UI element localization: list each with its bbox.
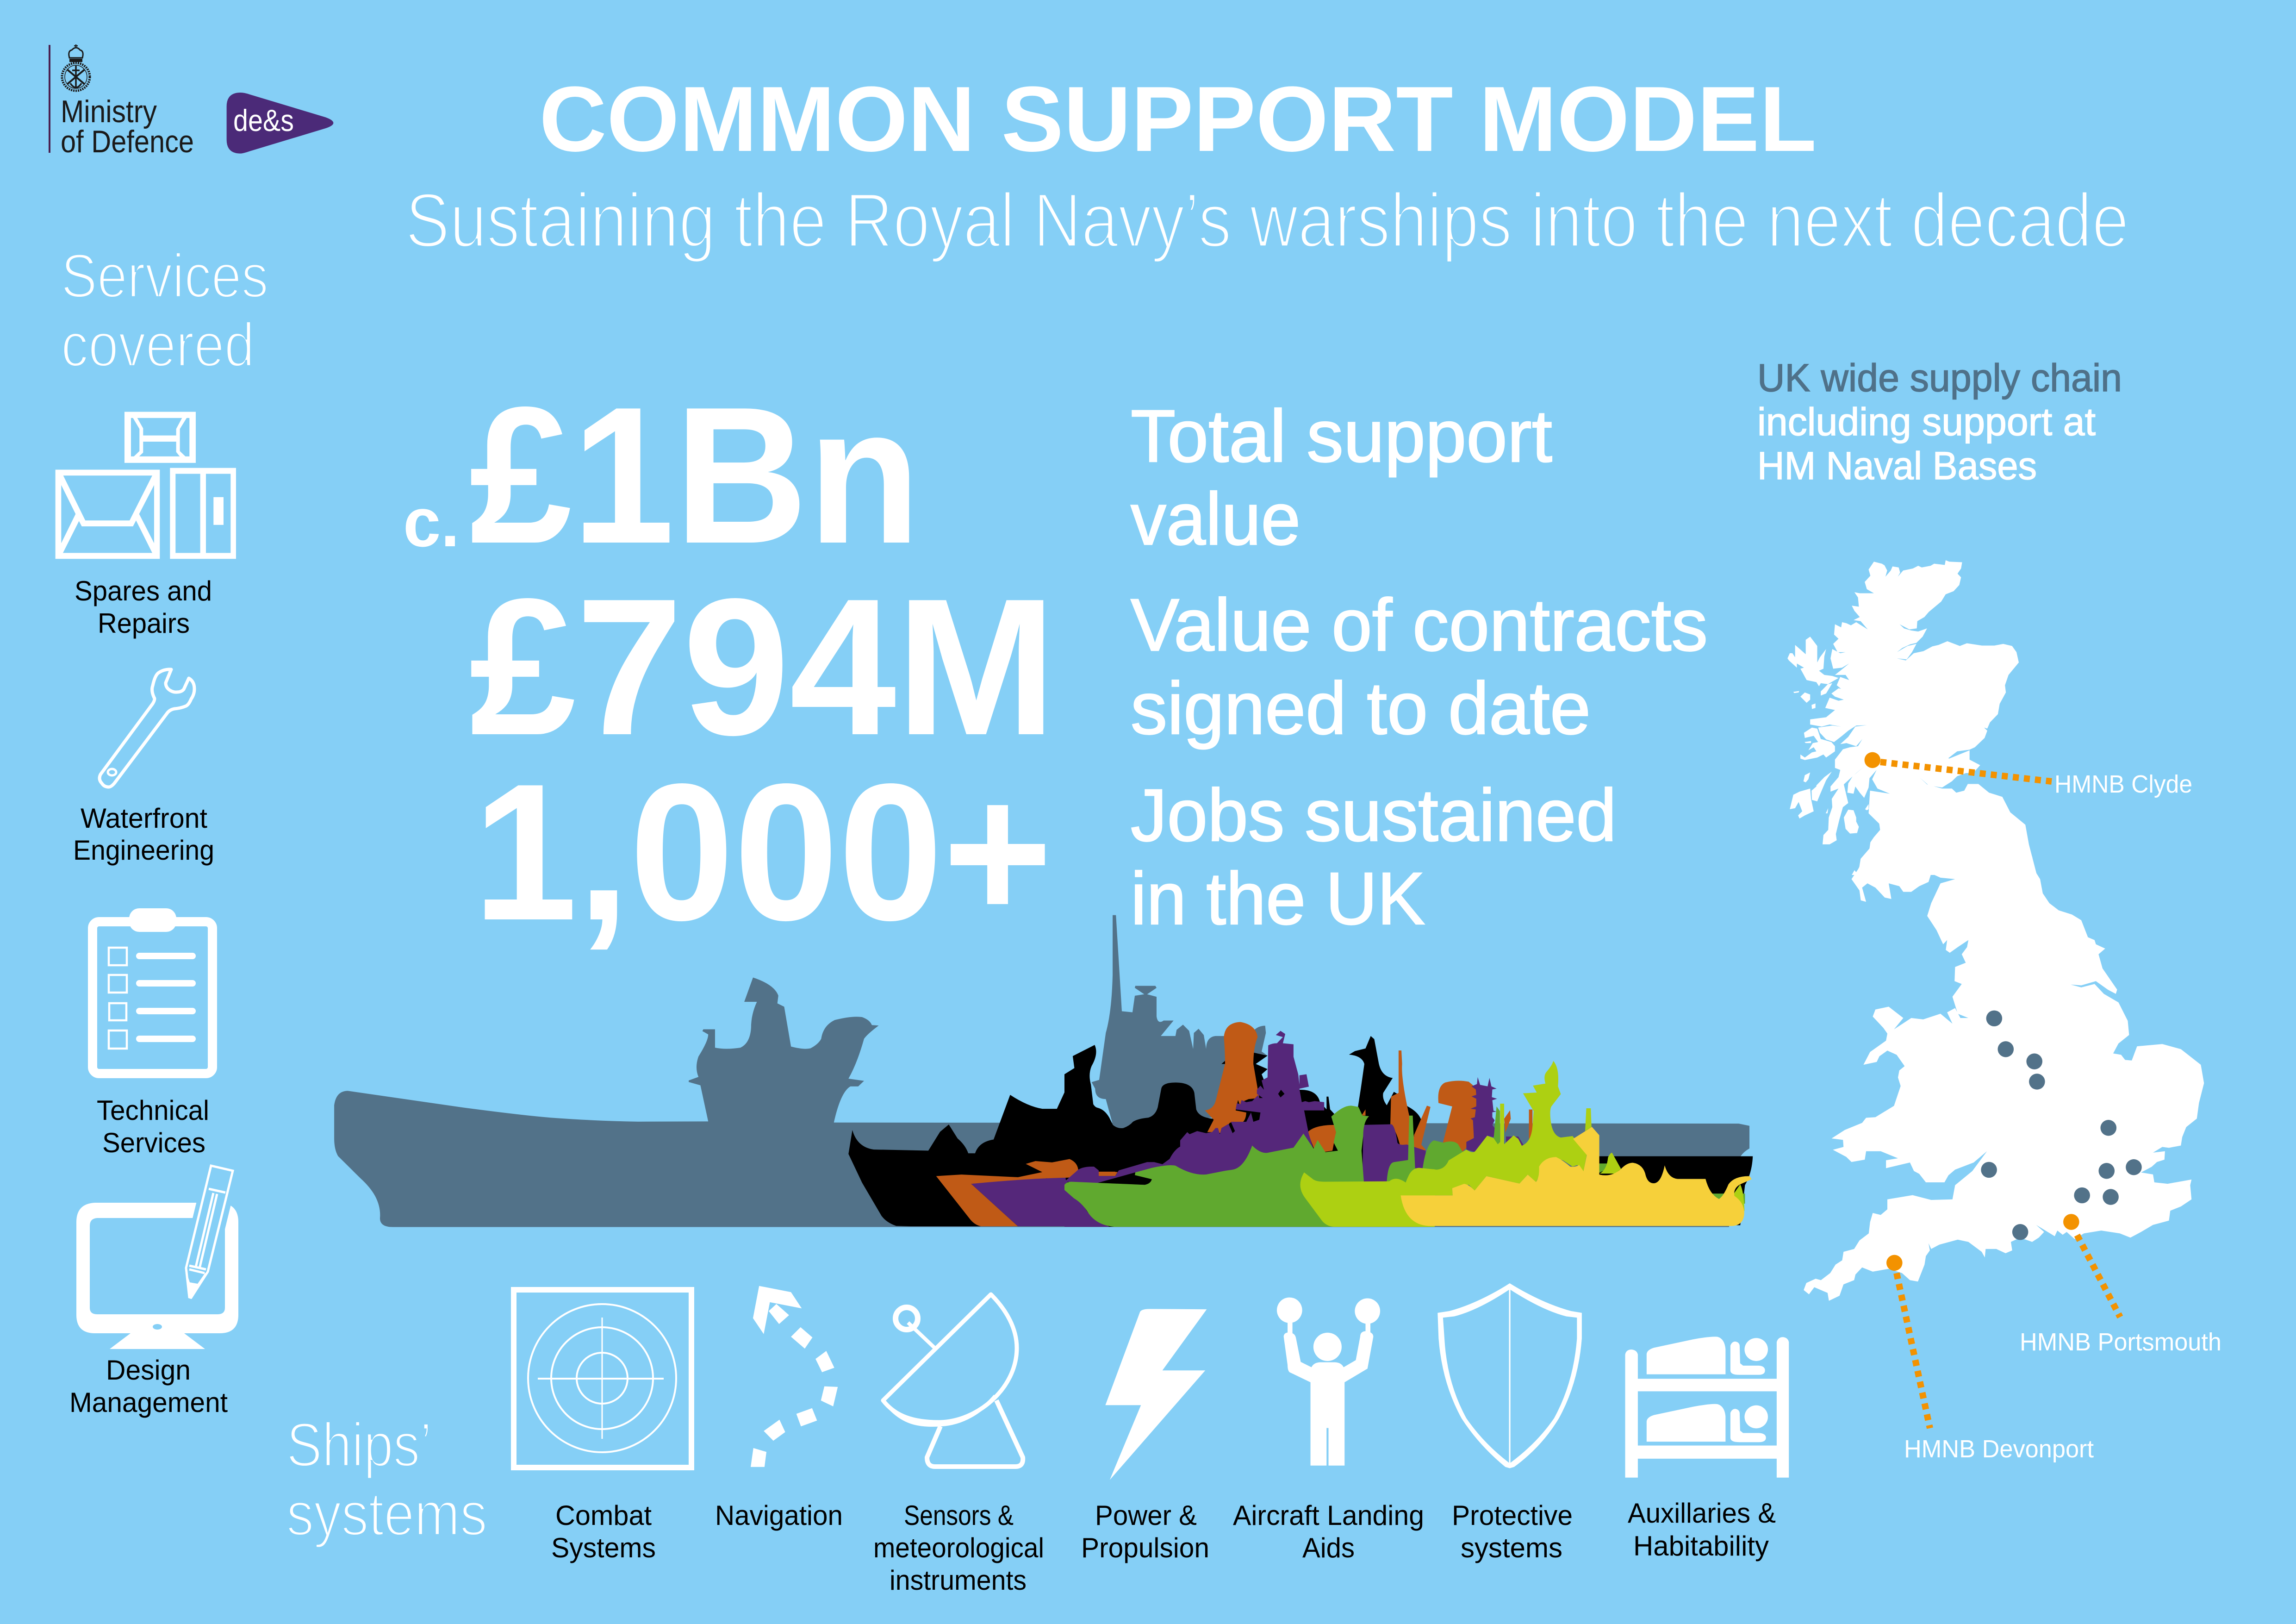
logo: Ministry of Defence: Ministry [61, 94, 157, 129]
big figure: contracts signed [469, 558, 1708, 776]
service: spares and repairs: Spares and [75, 575, 212, 606]
system: protective systems: Protective [1452, 1500, 1573, 1531]
system: sensors and meteorological instruments: meteorological [873, 1532, 1044, 1563]
ship: green [1064, 1106, 1745, 1227]
icon: dashed route arrow [751, 1286, 838, 1467]
icon: spanner [100, 669, 194, 787]
text: supply chain [1757, 356, 2122, 487]
service: spares and repairs: Repairs [98, 608, 190, 639]
map: naval base markers [1865, 752, 2079, 1271]
ship: orange [936, 1022, 1532, 1226]
big figure: contracts signed: £794M [469, 558, 1056, 776]
big figure: total support value [403, 367, 1552, 584]
icon: monitor and pencil [76, 1164, 239, 1349]
system: navigation: Navigation [715, 1500, 843, 1531]
text: supply chain: including support at [1757, 400, 2096, 443]
logo: de&s [227, 93, 333, 154]
heading: services covered [61, 242, 268, 380]
ship: black [848, 1036, 1753, 1227]
map: base labels: HMNB Clyde [2054, 770, 2192, 798]
icon: crest [62, 44, 90, 91]
service: spares and repairs [56, 412, 236, 639]
icon: marshaller with paddles [1277, 1298, 1380, 1466]
service: technical services [93, 908, 212, 1158]
map: base labels [1904, 770, 2221, 1463]
service: waterfront engineering: Engineering [73, 835, 214, 866]
icon: lightning bolt [1105, 1309, 1207, 1480]
icon: clipboard [93, 908, 212, 1074]
big figure: total support value: c. [403, 483, 460, 561]
service: technical services: Technical [97, 1095, 209, 1126]
ship: yellow [1401, 1127, 1752, 1226]
heading: ships' systems [286, 1411, 487, 1549]
text: supply chain: UK wide supply chain [1757, 356, 2122, 400]
service: waterfront engineering: Waterfront [81, 803, 207, 834]
heading: services covered: covered [61, 311, 255, 380]
icon: boxes [56, 412, 236, 559]
system: power and propulsion [1081, 1309, 1209, 1563]
icon: radar target [514, 1290, 691, 1468]
ship: lime [1300, 1061, 1744, 1227]
icon: bunk beds [1625, 1337, 1789, 1478]
map: base labels: HMNB Devonport [1904, 1435, 2094, 1463]
heading: ships' systems: Ships’ [286, 1411, 432, 1480]
system: protective systems [1437, 1283, 1582, 1563]
big figure: contracts signed: Value of contracts [1131, 583, 1708, 666]
big figure: contracts signed: signed to date [1131, 667, 1591, 750]
system: auxiliaries and habitability [1625, 1337, 1789, 1562]
service: design management: Management [69, 1387, 228, 1418]
system: combat systems: Systems [551, 1532, 656, 1563]
logo: de&s: de&s [233, 103, 294, 137]
map: UK with supply chain locations [1787, 560, 2221, 1463]
map: Scotland [1787, 560, 2037, 875]
system: aircraft landing aids: Aircraft Landing [1233, 1500, 1424, 1531]
map: supply chain sites [1981, 1011, 2142, 1240]
heading: services covered: Services [61, 242, 268, 311]
system: navigation [715, 1286, 843, 1531]
system: protective systems: systems [1461, 1532, 1562, 1563]
system: aircraft landing aids [1233, 1298, 1424, 1563]
map: naval bases dotted leaders [1880, 762, 2120, 1428]
text: supply chain: HM Naval Bases [1757, 444, 2037, 487]
big figure: jobs sustained: Jobs sustained [1131, 774, 1617, 856]
logo: Ministry of Defence [49, 44, 194, 159]
illustration: layered warship silhouettes [334, 915, 1753, 1227]
system: combat systems [514, 1290, 691, 1563]
big figure: total support value: £1Bn [469, 367, 921, 584]
system: aircraft landing aids: Aids [1302, 1532, 1355, 1563]
logo: Ministry of Defence: of Defence [61, 124, 194, 159]
ship: purple [971, 1031, 1524, 1227]
big figure: jobs sustained: in the UK [1131, 857, 1425, 940]
system: power and propulsion: Power & [1095, 1500, 1197, 1531]
service: technical services: Services [102, 1127, 205, 1158]
system: combat systems: Combat [555, 1500, 652, 1531]
ship: slate second tower [1092, 915, 1268, 1125]
service: design management: Design [106, 1355, 191, 1386]
big figure: total support value: value [1131, 477, 1300, 560]
system: power and propulsion: Propulsion [1081, 1532, 1209, 1563]
service: waterfront engineering [73, 669, 214, 866]
system: sensors and meteorological instruments: Sensors & [904, 1500, 1014, 1531]
title: COMMON SUPPORT MODEL [539, 68, 1817, 171]
map: Scottish islands [1787, 637, 1869, 875]
big figure: jobs sustained [473, 743, 1617, 961]
big figure: total support value: Total support [1131, 394, 1552, 477]
system: auxiliaries and habitability: Auxillaries & [1628, 1498, 1776, 1529]
heading: ships' systems: systems [286, 1480, 487, 1549]
icon: shield [1437, 1283, 1582, 1468]
service: design management [69, 1164, 239, 1418]
ship: slate carrier [334, 977, 1749, 1227]
icon: satellite dish [883, 1294, 1023, 1467]
map: base labels: HMNB Portsmouth [2020, 1328, 2221, 1356]
system: sensors and meteorological instruments: instruments [890, 1565, 1027, 1596]
system: sensors and meteorological instruments [873, 1294, 1044, 1596]
system: auxiliaries and habitability: Habitability [1633, 1530, 1769, 1562]
big figure: jobs sustained: 1,000+ [473, 743, 1052, 961]
map: England and Wales [1804, 856, 2204, 1301]
